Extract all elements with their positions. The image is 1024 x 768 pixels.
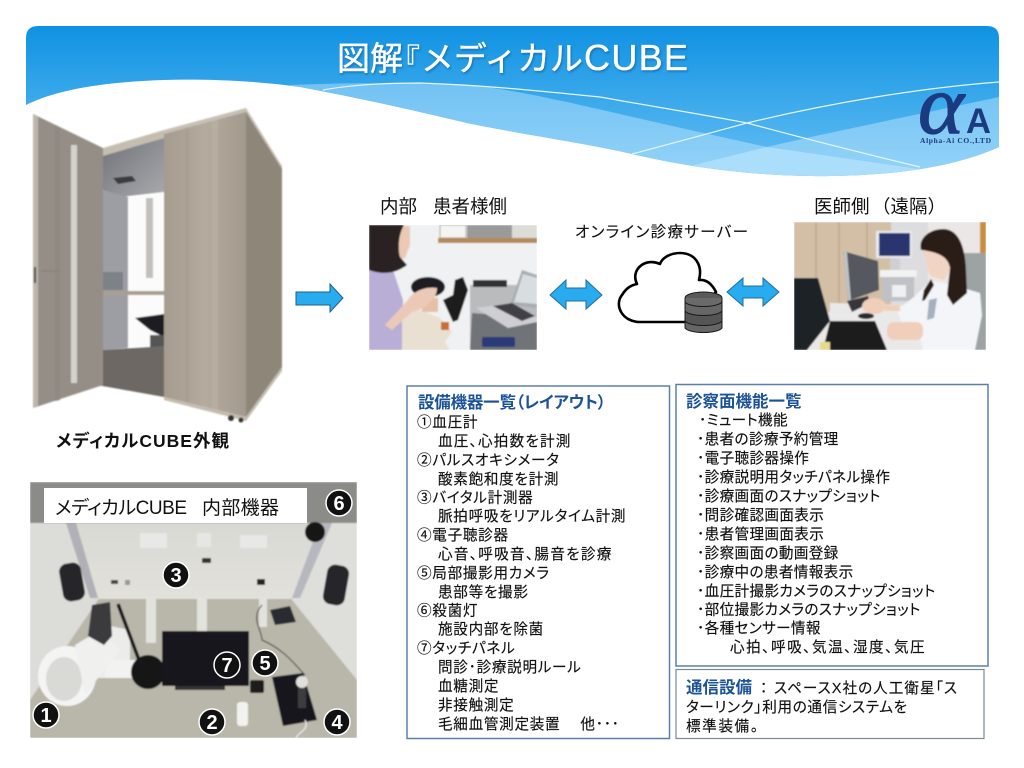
- header banner: [26, 26, 999, 180]
- arrow: cube to interior: [296, 284, 343, 312]
- communications text: 標準装備。: [686, 718, 758, 735]
- logo: Alpha-Ai CO.,LTD: [920, 136, 992, 145]
- function items: ･患者の診療予約管理: [697, 430, 839, 448]
- function items: ･患者管理画面表示: [697, 525, 824, 543]
- heading: patient side: 患者様側: [433, 196, 507, 217]
- panel: equipment list: [407, 386, 670, 738]
- photo: cube exterior: [33, 108, 282, 422]
- logo: A: [966, 102, 991, 141]
- title: メディカル: [421, 40, 583, 77]
- equipment items: ①血圧計: [417, 414, 478, 431]
- marker 7: 7: [221, 655, 233, 677]
- function items: ･部位撮影カメラのスナップショット: [697, 600, 921, 618]
- equipment items: 心音、呼吸音、腸音を診療: [438, 546, 612, 563]
- panel: communications: [676, 670, 984, 738]
- communications text: ターリンク」利用の通信システムを: [686, 699, 907, 716]
- equipment items: 血圧、心拍数を計測: [438, 433, 571, 450]
- title: 図解: [337, 40, 403, 77]
- equipment items: [417, 414, 626, 733]
- function items: ･各種センサー情報: [697, 620, 821, 637]
- equipment items: ⑤局部撮影用カメラ: [417, 564, 550, 582]
- marker 1: [33, 702, 59, 728]
- heading: server: オンライン診療サーバー: [575, 223, 748, 241]
- equipment items: 毛細血管測定装置 他･･･: [438, 715, 620, 733]
- marker 4: [324, 709, 350, 735]
- photo: interior equipment: [30, 482, 357, 738]
- communications text: ：: [760, 681, 767, 697]
- equipment items: 血糖測定: [438, 678, 499, 695]
- heading: doctor side: 医師側: [814, 196, 870, 217]
- marker 4: 4: [331, 712, 343, 734]
- equipment items: ④電子聴診器: [417, 527, 509, 544]
- function items: ･診療中の患者情報表示: [697, 564, 854, 581]
- label: interior equipment: 内部機器: [202, 497, 279, 519]
- heading: patient side: 内部: [380, 196, 417, 217]
- function items: ･血圧計撮影カメラのスナップショット: [697, 582, 936, 600]
- marker 2: 2: [206, 712, 218, 734]
- caption: cube exterior: メディカルCUBE外観: [56, 431, 230, 451]
- equipment items: 酸素飽和度を計測: [438, 471, 559, 488]
- function items: ･診察画面の動画登録: [697, 545, 839, 562]
- equipment items: 施設内部を除菌: [438, 621, 544, 638]
- communications text: 通信設備: [686, 678, 752, 697]
- marker 5: [252, 650, 278, 676]
- equipment items: 非接触測定: [438, 697, 514, 714]
- marker 6: [326, 490, 352, 516]
- marker 5: 5: [259, 653, 271, 675]
- communications text: [686, 678, 957, 735]
- photo: doctor side: [794, 222, 986, 350]
- function items: ･ミュート機能: [699, 412, 788, 429]
- communications text: スペースX社の人工衛星「ス: [774, 680, 957, 697]
- label: interior equipment: [44, 488, 307, 523]
- function items: 心拍、呼吸、気温、湿度、気圧: [730, 639, 925, 656]
- marker 7: [214, 652, 240, 678]
- logo: α: [918, 59, 966, 152]
- title: CUBE: [584, 37, 688, 78]
- title: 『: [390, 44, 420, 77]
- heading: doctor side: （遠隔）: [872, 196, 946, 217]
- heading: functions: 診察面機能一覧: [686, 391, 802, 411]
- equipment items: ⑦タッチパネル: [417, 640, 515, 657]
- function items: ･電子聴診器操作: [697, 450, 809, 467]
- heading: equipment list: 設備機器一覧（レイアウト）: [418, 393, 606, 412]
- label: interior equipment: メディカルCUBE: [55, 497, 187, 519]
- marker 2: [199, 709, 225, 735]
- equipment items: ②パルスオキシメータ: [417, 452, 560, 469]
- marker 1: 1: [40, 705, 52, 727]
- arrow: server to doctor: [727, 278, 779, 306]
- equipment items: 問診･診療説明ルール: [438, 659, 582, 676]
- marker 6: 6: [333, 493, 345, 515]
- panel: consultation screen functions: [676, 384, 988, 666]
- marker 3: 3: [170, 565, 182, 587]
- function items: ･問診確認画面表示: [697, 507, 824, 524]
- function items: [697, 412, 936, 656]
- function items: ･診療説明用タッチパネル操作: [697, 469, 890, 486]
- logo: [918, 59, 992, 152]
- equipment items: 患部等を撮影: [438, 583, 529, 601]
- equipment items: 脈拍呼吸をリアルタイム計測: [438, 508, 626, 525]
- arrow: patient to server: [550, 280, 602, 309]
- marker 3: [163, 562, 189, 588]
- icon: cloud with database: [619, 253, 722, 332]
- equipment items: ③バイタル計測器: [417, 490, 533, 506]
- photo: patient side: [369, 225, 537, 350]
- equipment items: ⑥殺菌灯: [417, 602, 478, 620]
- function items: ･診療画面のスナップショット: [697, 488, 881, 505]
